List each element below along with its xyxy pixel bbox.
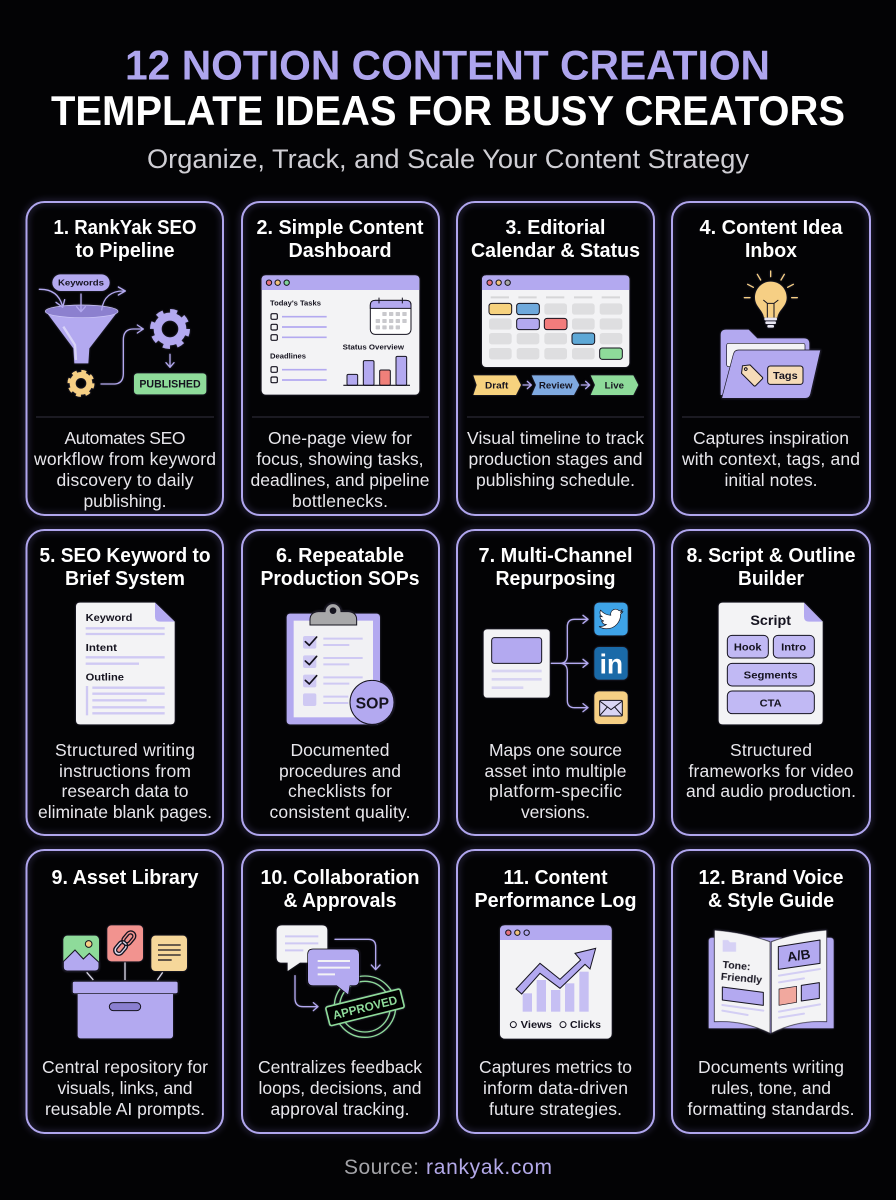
description: eliminate blank pages. [38, 802, 212, 822]
description: Structured [730, 740, 812, 760]
description: initial notes. [724, 470, 818, 490]
icon: funnel to published pipeline: Keywords [58, 278, 104, 288]
icon: funnel to published pipeline: PUBLISHED [139, 379, 201, 391]
icon: analytics window [500, 925, 612, 1039]
heading: 9. Asset Library [52, 866, 199, 889]
icon: calendar with status flow: Live [605, 381, 624, 391]
icon: script builder document: CTA [760, 698, 782, 709]
icon: open style guide book: A/B [786, 946, 812, 965]
icon: script builder document: Intro [781, 643, 806, 654]
heading [54, 216, 197, 262]
icon: SOP clipboard [287, 604, 394, 724]
description: discovery to daily [56, 470, 194, 490]
description: focus, showing tasks, [256, 449, 424, 469]
heading: Performance Log [474, 889, 636, 912]
icon: script builder document: Script [750, 612, 791, 628]
icon: open style guide book: Tone: [722, 960, 751, 973]
icon: one asset branching to channels: in [600, 648, 623, 679]
heading [256, 216, 424, 262]
source footer: Source: [344, 1156, 419, 1179]
description: Documented [290, 740, 390, 760]
heading [686, 544, 856, 590]
description: inform data-driven [483, 1078, 628, 1098]
heading: & Style Guide [708, 889, 834, 912]
heading [260, 544, 420, 590]
description [33, 428, 216, 511]
panel: 12 Brand Voice and Style Guide [672, 850, 870, 1133]
heading: to Pipeline [76, 239, 174, 262]
icon: asset box with tiles [63, 925, 187, 1038]
icon: calendar with status flow [473, 275, 638, 395]
subtitle: Organize, Track, and Scale Your Content Strategy [147, 144, 749, 174]
panel: 10 Collaboration and Approvals [242, 850, 439, 1133]
description [688, 1057, 854, 1119]
panel: 7 Multi-Channel Repurposing [457, 530, 654, 835]
description: Maps one source [489, 740, 622, 760]
icon: SOP clipboard: SOP [356, 695, 389, 712]
description [250, 428, 430, 511]
heading: 11. Content [504, 866, 608, 889]
description [258, 1057, 422, 1119]
description: Structured writing [55, 740, 195, 760]
panel: 11 Content Performance Log [457, 850, 654, 1133]
icon: brief document [76, 603, 175, 724]
heading: 7. Multi-Channel [478, 544, 632, 567]
description [681, 428, 860, 490]
heading [471, 216, 640, 262]
icon: light bulb and folder with tags [721, 271, 821, 398]
heading: Brief System [65, 567, 185, 590]
icon: dashboard window [262, 275, 419, 395]
description: formatting standards. [688, 1099, 854, 1119]
description: consistent quality. [270, 802, 410, 822]
description [38, 740, 212, 822]
description: bottlenecks. [292, 491, 388, 511]
description: Centralizes feedback [258, 1057, 422, 1077]
icon: script builder document: Hook [734, 643, 762, 654]
panel: 1 RankYak SEO to Pipeline [26, 202, 223, 515]
icon: analytics window: Views [521, 1020, 552, 1031]
icon: brief document: Outline [86, 673, 125, 684]
heading: Dashboard [288, 239, 392, 262]
description: rules, tone, and [711, 1078, 831, 1098]
description: and audio production. [686, 781, 856, 801]
heading: 8. Script & Outline [686, 544, 856, 567]
description: deadlines, and pipeline [250, 470, 430, 490]
description [270, 740, 410, 822]
heading [698, 866, 844, 912]
heading: Inbox [745, 239, 798, 262]
heading [474, 866, 636, 912]
source footer [344, 1156, 552, 1179]
icon: dashboard window: Status Overview [343, 342, 404, 351]
icon: analytics window: Clicks [570, 1020, 601, 1031]
panel: 6 Repeatable Production SOPs [242, 530, 439, 835]
icon: brief document: Keyword [86, 613, 132, 624]
heading: Repurposing [496, 567, 616, 590]
icon: one asset branching to channels [484, 603, 628, 724]
panel: 3 Editorial Calendar and Status [457, 202, 654, 515]
heading: 10. Collaboration [260, 866, 420, 889]
description: approval tracking. [270, 1099, 410, 1119]
description [484, 740, 626, 822]
description: Automates SEO [64, 428, 186, 448]
heading: 1. RankYak SEO [54, 216, 197, 239]
icon: light bulb and folder with tags: Tags [773, 371, 798, 382]
panel: 5 SEO Keyword to Brief System [26, 530, 223, 835]
icon: calendar with status flow: Draft [485, 381, 508, 391]
heading: 5. SEO Keyword to [40, 544, 210, 567]
description: future strategies. [489, 1099, 622, 1119]
heading: 4. Content Idea [700, 216, 843, 239]
heading [700, 216, 843, 262]
panel: 4 Content Idea Inbox [672, 202, 870, 515]
heading [260, 866, 420, 912]
description: reusable AI prompts. [45, 1099, 205, 1119]
icon: feedback bubbles and approved stamp [277, 925, 405, 1037]
description: One-page view for [268, 428, 412, 448]
heading: Builder [738, 567, 804, 590]
description: frameworks for video [688, 761, 854, 781]
description: loops, decisions, and [258, 1078, 422, 1098]
description: workflow from keyword [33, 449, 216, 469]
icon: calendar with status flow: Review [539, 381, 573, 391]
title: 12 NOTION CONTENT CREATION [125, 42, 770, 88]
heading: 2. Simple Content [256, 216, 424, 239]
heading: 12. Brand Voice [698, 866, 844, 889]
icon: script builder document [719, 603, 823, 724]
icon: open style guide book: Friendly [720, 972, 763, 987]
icon: dashboard window: Today's Tasks [270, 299, 321, 308]
icon: dashboard window: Deadlines [270, 352, 306, 361]
title: TEMPLATE IDEAS FOR BUSY CREATORS [51, 87, 845, 134]
description: publishing. [84, 491, 166, 511]
description: Captures metrics to [479, 1057, 632, 1077]
description [686, 740, 856, 801]
icon: script builder document: Segments [744, 670, 798, 681]
description: procedures and [279, 761, 401, 781]
description: Visual timeline to track [467, 428, 644, 448]
description: visuals, links, and [58, 1078, 192, 1098]
panel: 2 Simple Content Dashboard [242, 202, 439, 515]
description: platform-specific [489, 781, 622, 801]
heading: 6. Repeatable [276, 544, 404, 567]
description: checklists for [288, 781, 392, 801]
description: publishing schedule. [476, 470, 635, 490]
heading [40, 544, 210, 590]
heading: Production SOPs [260, 567, 420, 590]
description: production stages and [468, 449, 642, 469]
description: with context, tags, and [681, 449, 860, 469]
heading: 3. Editorial [506, 216, 606, 239]
description: instructions from [59, 761, 191, 781]
icon: brief document: Intent [86, 643, 118, 654]
title [51, 42, 845, 134]
heading: & Approvals [284, 889, 396, 912]
description [42, 1057, 208, 1119]
icon: open style guide book [709, 930, 834, 1033]
icon: feedback bubbles and approved stamp: APPROVED [331, 993, 399, 1022]
description: Central repository for [42, 1057, 208, 1077]
description: Documents writing [698, 1057, 844, 1077]
description: asset into multiple [484, 761, 626, 781]
panel: 8 Script and Outline Builder [672, 530, 870, 835]
description: Captures inspiration [693, 428, 849, 448]
description: versions. [521, 802, 590, 822]
source footer: rankyak.com [426, 1156, 552, 1179]
icon: funnel to published pipeline [39, 274, 206, 395]
description [467, 428, 644, 490]
heading [478, 544, 632, 590]
description [479, 1057, 632, 1119]
description: research data to [62, 781, 188, 801]
heading: Calendar & Status [471, 239, 640, 262]
panel: 9 Asset Library [26, 850, 223, 1133]
